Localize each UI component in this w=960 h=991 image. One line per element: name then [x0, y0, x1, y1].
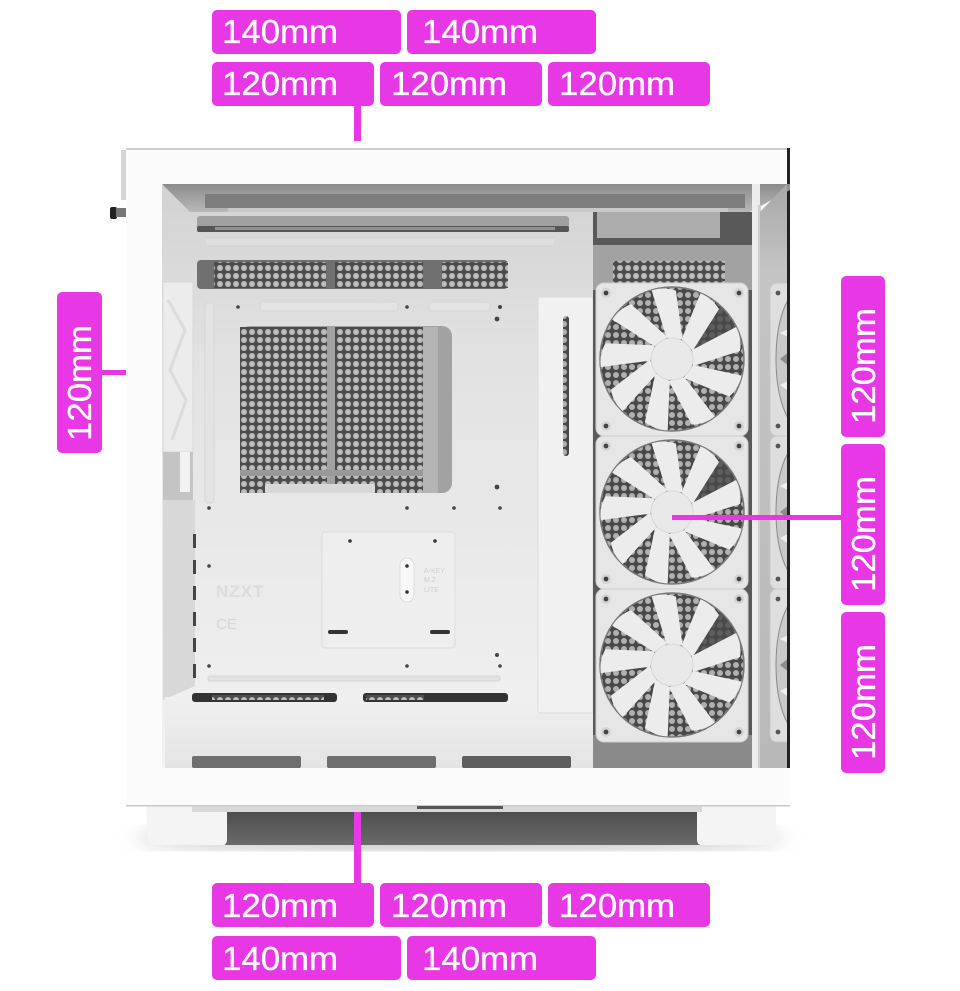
label: 140mm: 140mm [222, 940, 338, 977]
label: 120mm: 120mm [222, 65, 338, 102]
label: 140mm [212, 936, 401, 980]
right edge line [787, 148, 790, 768]
label: 120mm [841, 444, 885, 605]
label: 120mm: 120mm [391, 887, 507, 924]
label: 120mm: 120mm [222, 887, 338, 924]
top interior recess [162, 184, 790, 212]
label: 120mm: 120mm [391, 65, 507, 102]
bottom labels [212, 883, 710, 980]
top vent [197, 216, 569, 232]
label: 120mm: 120mm [845, 308, 882, 424]
PSU shroud [165, 693, 593, 768]
left foot [146, 806, 227, 845]
rear label [57, 292, 102, 453]
label: 120mm [380, 883, 542, 927]
rear fan (side view) [163, 282, 193, 500]
connector line: front [672, 515, 842, 520]
label: 120mm [548, 62, 710, 106]
label: 120mm: 120mm [559, 887, 675, 924]
label: 140mm: 140mm [422, 940, 538, 977]
front side fans [770, 284, 787, 742]
label: 120mm [212, 883, 374, 927]
rear label: 120mm [61, 325, 98, 441]
label: 120mm: 120mm [559, 65, 675, 102]
label: 120mm [548, 883, 710, 927]
right foot [697, 806, 776, 845]
label: 140mm [407, 936, 596, 980]
SSD mount plate: M.2 [424, 577, 436, 584]
label: 120mm [841, 612, 885, 773]
upper slot [205, 238, 555, 246]
label: 140mm: 140mm [222, 13, 338, 50]
case body [110, 148, 790, 849]
front labels [841, 276, 885, 773]
front glass pillar [752, 184, 787, 768]
label: 120mm [212, 62, 374, 106]
backplate [162, 184, 594, 768]
fan 1 [596, 283, 748, 436]
SSD mount plate [322, 532, 455, 648]
fan 2 [596, 436, 748, 589]
fan 3 [596, 589, 748, 742]
engraved logo: NZXT [216, 582, 264, 601]
label: 120mm: 120mm [845, 476, 882, 592]
SSD mount plate: LITE [424, 587, 439, 594]
connector line: rear [100, 370, 126, 375]
connector line: bottom [354, 812, 361, 884]
plate slots [205, 302, 500, 681]
cable cover [538, 297, 593, 713]
upper perforated vent [197, 260, 508, 289]
label: 120mm [841, 276, 885, 437]
label: 140mm [212, 10, 401, 54]
SSD mount plate: A-KEY [424, 568, 445, 575]
engraved CE mark: CE [216, 616, 237, 633]
label: 120mm: 120mm [845, 644, 882, 760]
outer shell [126, 148, 790, 806]
label: 120mm [380, 62, 542, 106]
label: 140mm: 140mm [422, 13, 538, 50]
connector line: top [354, 105, 361, 141]
screw holes [207, 305, 502, 668]
label: 140mm [407, 10, 596, 54]
floor shadow [135, 827, 785, 849]
big motherboard cutout [240, 326, 452, 493]
underside gap [225, 812, 700, 845]
right fan chamber [593, 212, 752, 768]
top labels [212, 10, 710, 106]
rear thumbscrew [110, 150, 127, 219]
PCI slot covers [163, 500, 196, 700]
interior [162, 184, 824, 768]
